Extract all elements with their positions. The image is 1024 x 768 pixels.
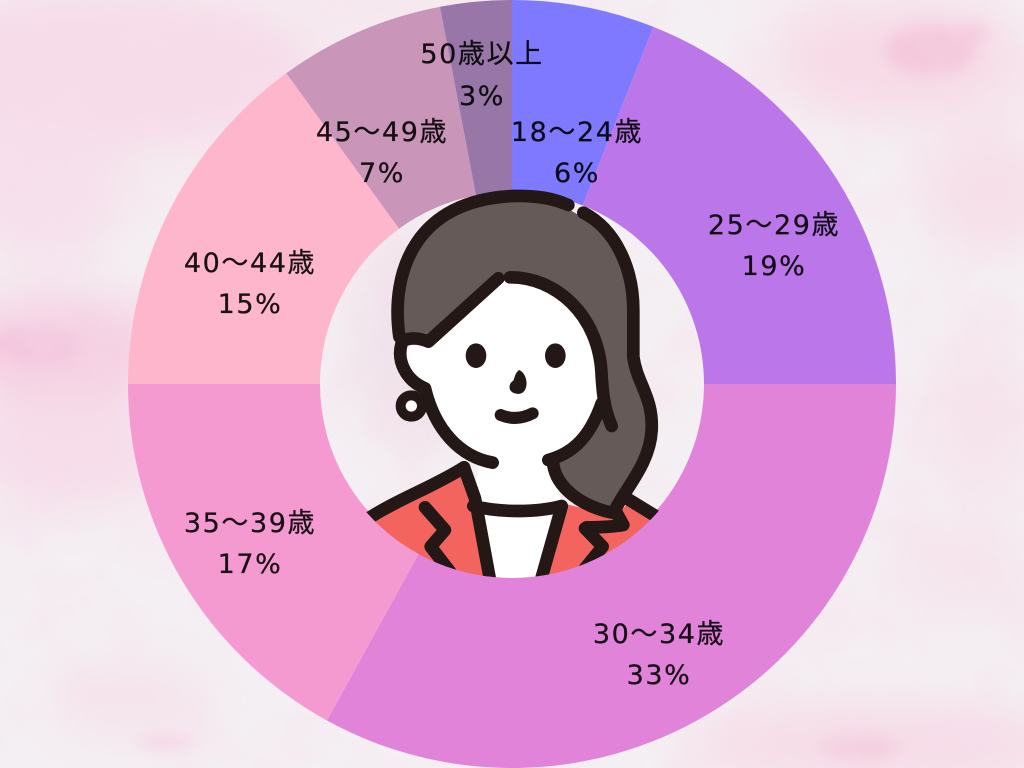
label: 18〜24歳 6%: 6%: [554, 158, 600, 189]
label: 30〜34歳 33%: [593, 619, 725, 691]
label: 50歳以上 3%: 3%: [459, 81, 505, 112]
donut chart: [128, 0, 896, 768]
label: 25〜29歳 19%: 19%: [742, 251, 806, 282]
slice: 35-39: [128, 384, 420, 720]
label: 35〜39歳 17%: [184, 508, 316, 580]
label: 30〜34歳 33%: 30～34歳: [593, 619, 725, 650]
label: 18〜24歳 6%: 18～24歳: [511, 117, 643, 148]
slice: 40-44: [128, 73, 399, 384]
label: 50歳以上 3%: 50歳以上: [420, 39, 544, 70]
eyes: [466, 343, 486, 368]
hair fill: [398, 196, 652, 513]
label: 35〜39歳 17%: 17%: [218, 549, 282, 580]
label: 30〜34歳 33%: 33%: [627, 660, 691, 691]
label: 40〜44歳 15%: [184, 248, 316, 320]
label: 40〜44歳 15%: 15%: [218, 289, 282, 320]
label: 45〜49歳 7%: [316, 117, 448, 189]
jacket outlines: [368, 467, 657, 583]
label: 40〜44歳 15%: 40～44歳: [184, 248, 316, 279]
slice: 18-24: [512, 0, 653, 206]
earring: [401, 395, 422, 417]
mouth: [501, 413, 533, 418]
nose: [510, 370, 527, 394]
label: 25〜29歳 19%: [708, 210, 840, 282]
label: 50歳以上 3%: [420, 39, 544, 112]
label: 45〜49歳 7%: 7%: [359, 158, 405, 189]
slice: 30-34: [327, 384, 896, 768]
shirt and neck: [476, 466, 560, 578]
slice: 25-29: [583, 27, 896, 384]
label: 25〜29歳 19%: 25～29歳: [708, 210, 840, 241]
label: 35〜39歳 17%: 35～39歳: [184, 508, 316, 539]
face: [402, 277, 602, 470]
label: 18〜24歳 6%: [511, 117, 643, 189]
slice: 50+: [440, 0, 512, 195]
illustration: woman in red jacket: [360, 196, 667, 590]
jacket: [366, 461, 659, 578]
hair outline: [398, 196, 652, 513]
label: 45〜49歳 7%: 45～49歳: [316, 117, 448, 148]
slice: 45-49: [286, 7, 476, 229]
